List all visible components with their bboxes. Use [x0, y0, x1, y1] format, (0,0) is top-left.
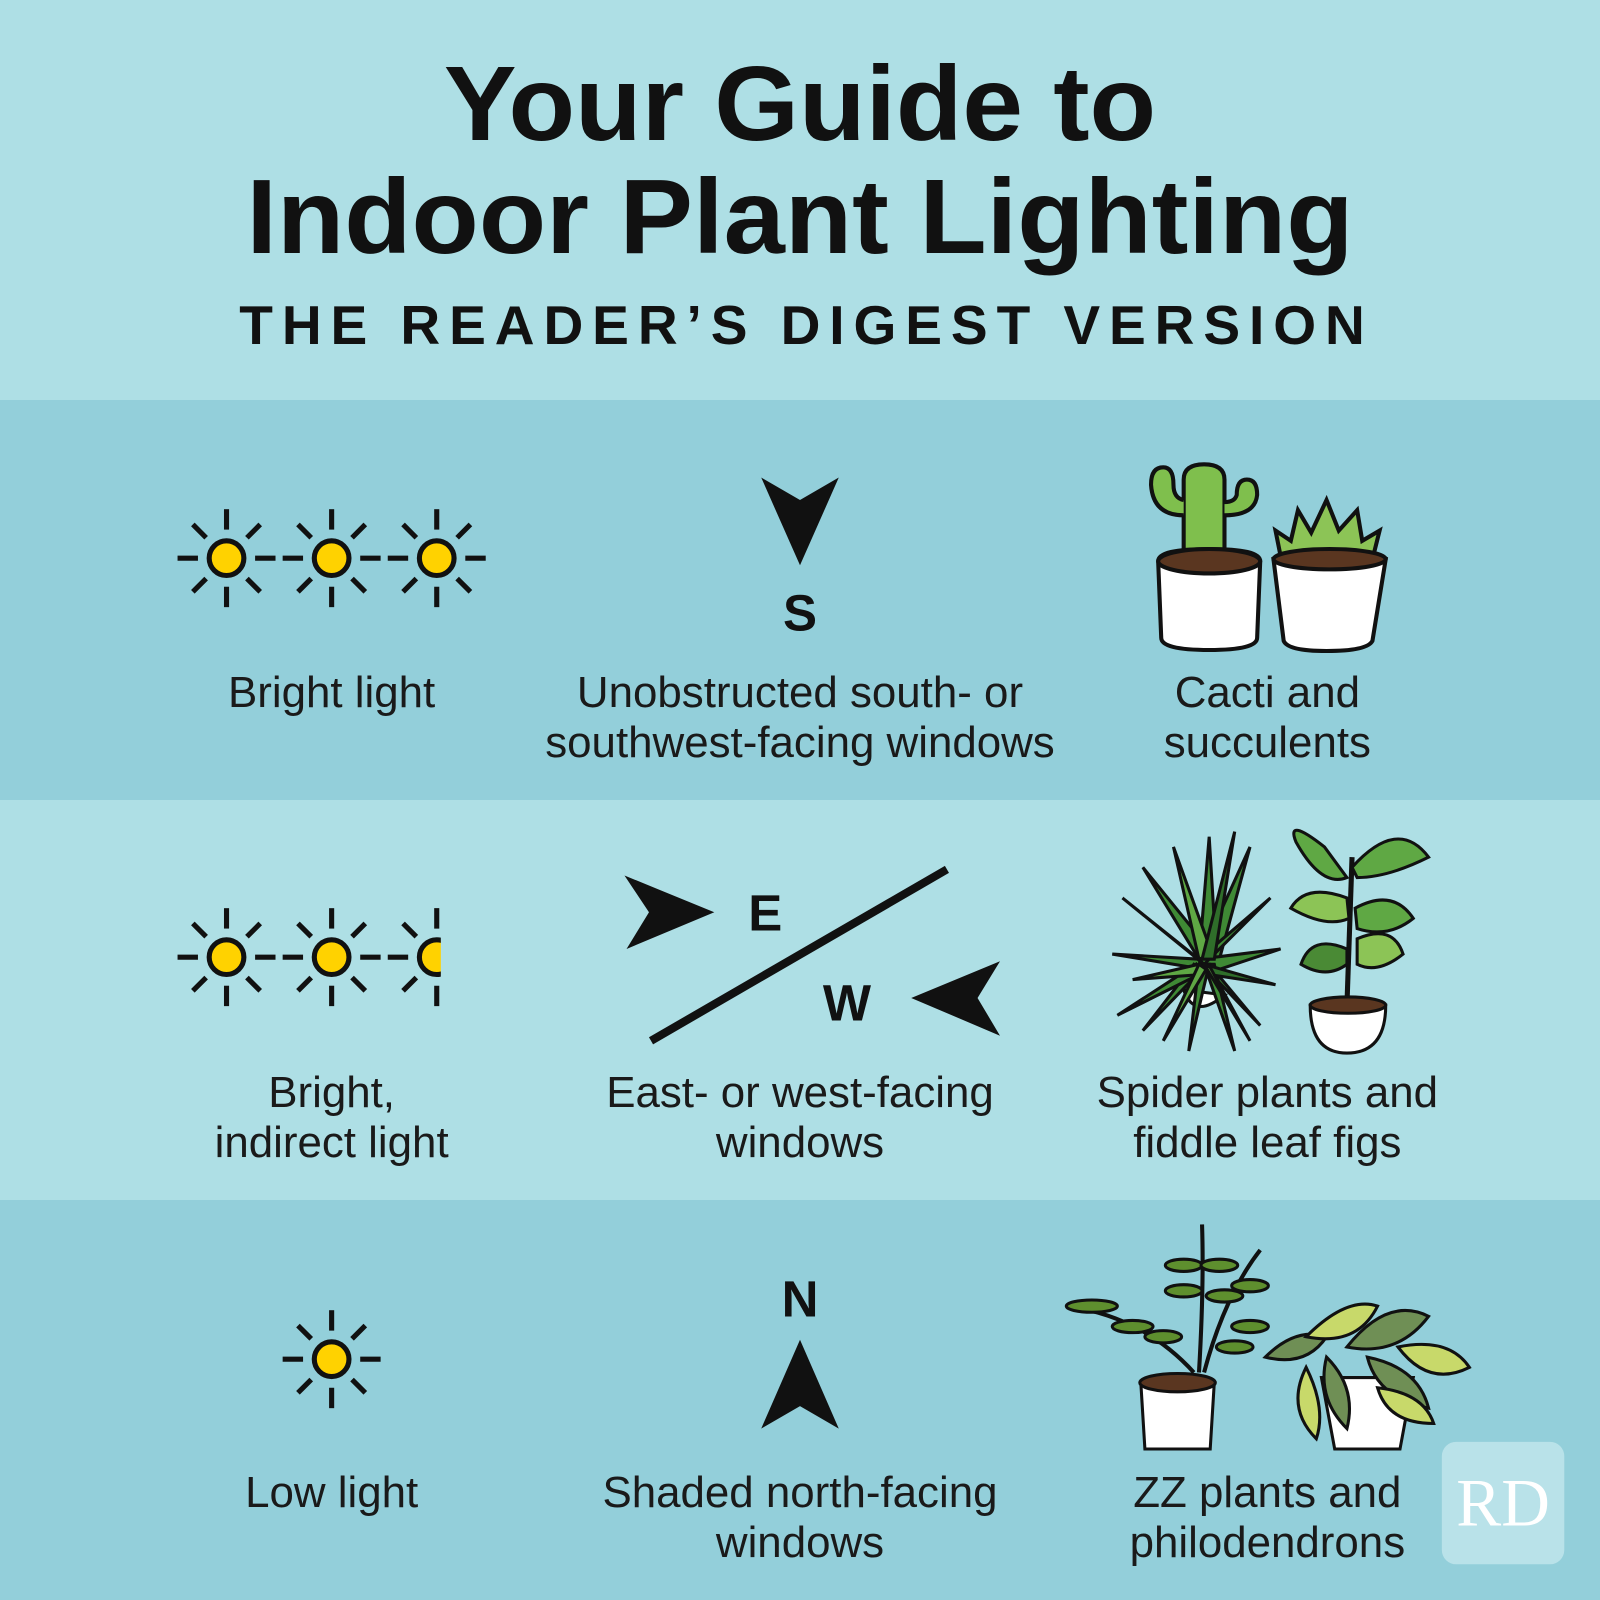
- icon: spider plant and fiddle leaf fig: [1112, 830, 1429, 1053]
- label: east west windows: East- or west-facing: [606, 1068, 994, 1117]
- icon: east-west compass: W: [823, 974, 872, 1031]
- subtitle: THE READER’S DIGEST VERSION: [239, 294, 1365, 356]
- label: cacti: succulents: [1164, 718, 1371, 767]
- label: spider plants: Spider plants and: [1097, 1068, 1438, 1117]
- title: [246, 45, 1354, 276]
- label: zz plants: ZZ plants and: [1133, 1468, 1401, 1517]
- label: east west windows: windows: [715, 1118, 884, 1167]
- label: spider plants: fiddle leaf figs: [1133, 1118, 1401, 1167]
- label: cacti: Cacti and: [1175, 668, 1360, 717]
- icon: three suns bright light: [178, 509, 486, 607]
- label: bright light: Bright light: [228, 668, 435, 717]
- title: Indoor Plant Lighting: [246, 158, 1354, 276]
- icon: zz plant and philodendron: [1066, 1224, 1469, 1449]
- icon: north arrow: N: [782, 1270, 818, 1327]
- icon: east-west compass: [624, 869, 1000, 1041]
- icon: north arrow: [761, 1270, 839, 1429]
- background header: [0, 0, 1600, 400]
- label: south windows: southwest-facing windows: [545, 718, 1055, 767]
- icon: south arrow: [761, 478, 839, 642]
- icon: two and half suns: [178, 908, 441, 1006]
- logo: RD: RD: [1456, 1466, 1550, 1541]
- band row 1: [0, 400, 1600, 800]
- label: bright indirect: Bright,: [268, 1068, 395, 1117]
- label: bright indirect: indirect light: [215, 1118, 449, 1167]
- band row 2: [0, 800, 1600, 1200]
- icon: east-west compass: E: [748, 885, 782, 942]
- label: zz plants: philodendrons: [1130, 1518, 1405, 1567]
- logo: RD: [1442, 1442, 1564, 1564]
- title: Your Guide to: [444, 45, 1156, 163]
- icon: south arrow: S: [783, 585, 817, 642]
- label: north windows: Shaded north-facing: [602, 1468, 998, 1517]
- label: north windows: windows: [715, 1518, 884, 1567]
- label: low light: Low light: [245, 1468, 418, 1517]
- label: south windows: Unobstructed south- or: [577, 668, 1023, 717]
- band row 3: [0, 1200, 1600, 1600]
- icon: single sun: [283, 1310, 381, 1408]
- icon: cacti and succulent: [1151, 464, 1386, 651]
